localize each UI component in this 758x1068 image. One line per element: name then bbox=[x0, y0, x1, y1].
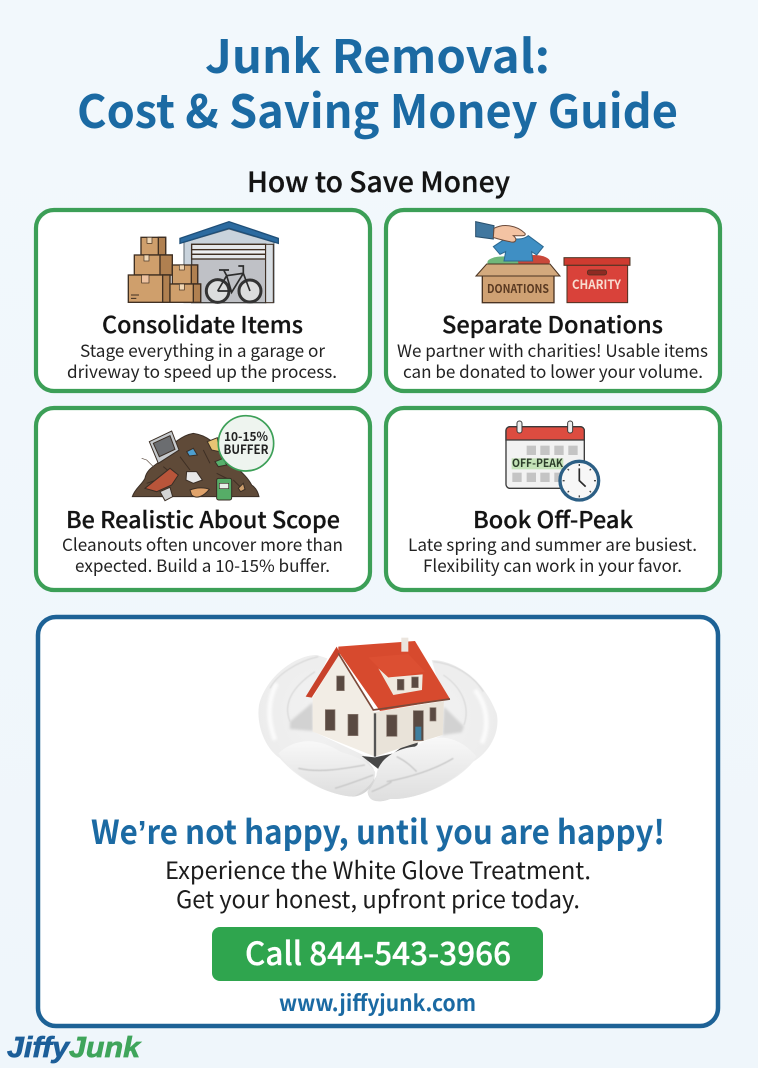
description: driveway to speed up the process. bbox=[67, 358, 337, 383]
website: www.jiffyjunk.com bbox=[279, 986, 476, 1018]
charity label: CHARITY bbox=[572, 274, 621, 293]
supporting text: Get your honest, upfront price today. bbox=[176, 880, 580, 915]
panel: separate donations bbox=[386, 210, 720, 391]
logo: JiffyJunk bbox=[7, 1032, 142, 1064]
heading: Be Realistic About Scope bbox=[66, 501, 340, 535]
off-peak label: OFF-PEAK bbox=[512, 455, 563, 471]
description bbox=[62, 531, 343, 577]
description: Stage everything in a garage or bbox=[80, 337, 325, 362]
panel: white glove call to action bbox=[38, 617, 718, 1026]
slogan: We’re not happy, until you are happy! bbox=[91, 806, 665, 854]
illustration: house held in white gloves bbox=[258, 638, 497, 801]
icon: calendar and clock bbox=[506, 421, 599, 500]
badge text: BUFFER bbox=[224, 439, 269, 458]
icon: junk pile with buffer badge bbox=[132, 416, 274, 501]
donations label: DONATIONS bbox=[487, 280, 549, 297]
description: can be donated to lower your volume. bbox=[403, 358, 703, 383]
panel: be realistic about scope bbox=[36, 408, 370, 590]
icon: donation boxes bbox=[476, 222, 630, 303]
title bbox=[77, 21, 678, 142]
call button: Call 844-543-3966 bbox=[245, 929, 511, 975]
description: expected. Build a 10-15% buffer. bbox=[75, 552, 330, 577]
supporting text bbox=[165, 851, 591, 915]
section heading: How to Save Money bbox=[247, 161, 510, 201]
badge text: 10-15% bbox=[224, 426, 268, 445]
heading: Book Off-Peak bbox=[473, 501, 633, 535]
description: Cleanouts often uncover more than bbox=[62, 531, 343, 556]
title: Cost & Saving Money Guide bbox=[77, 76, 678, 142]
description bbox=[408, 531, 697, 577]
description: We partner with charities! Usable items bbox=[397, 337, 708, 362]
call button bbox=[212, 927, 543, 981]
heading: Consolidate Items bbox=[102, 306, 303, 340]
title: Junk Removal: bbox=[205, 21, 550, 87]
description bbox=[397, 337, 708, 383]
heading: Separate Donations bbox=[442, 306, 663, 340]
panel: book off-peak bbox=[386, 408, 720, 590]
supporting text: Experience the White Glove Treatment. bbox=[165, 851, 591, 886]
description: Flexibility can work in your favor. bbox=[423, 552, 682, 577]
description bbox=[67, 337, 337, 383]
badge text bbox=[224, 426, 269, 458]
panel: consolidate items bbox=[36, 210, 370, 391]
description: Late spring and summer are busiest. bbox=[408, 531, 697, 556]
icon: boxes and garage bbox=[128, 222, 278, 303]
